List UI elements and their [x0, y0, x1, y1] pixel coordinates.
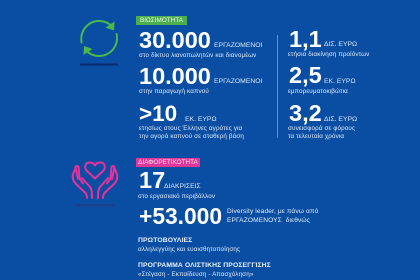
stat: 30.000 employees: ΕΡΓΑΖΟΜΕΝΟΙ — [214, 42, 262, 48]
text block: initiatives: ΠΡΩΤΟΒΟΥΛΙΕΣ — [138, 236, 192, 244]
stat: 1,1 billion euro — [288, 26, 370, 58]
divider — [277, 35, 278, 138]
stat: 10.000 employees: ΕΡΓΑΖΟΜΕΝΟΙ — [214, 78, 262, 84]
text block: holistic programme: ΠΡΟΓΡΑΜΜΑ ΟΛΙΣΤΙΚΗΣ ΠΡΟΣΕΓΓΙΣΗΣ — [138, 262, 271, 268]
stat: 3,2 billion euro: συνεισφορά σε φόρους — [288, 125, 355, 132]
stat: 1,1 billion euro: ΔΙΣ. ΕΥΡΩ — [324, 40, 357, 48]
stat: 17 awards — [138, 167, 215, 200]
stat: 3,2 billion euro: 3,2 — [289, 100, 322, 126]
stat: 2,5 million euro: 2,5 — [289, 62, 322, 88]
label: sustainability: ΒΙΩΣΙΜΟΤΗΤΑ — [140, 17, 183, 24]
stat: 2,5 million euro: εμπορευματοκιβώτια — [288, 88, 348, 95]
stat: 3,2 billion euro: ΔΙΣ. ΕΥΡΩ — [324, 116, 357, 122]
stat: 10.000 employees: στην παραγωγή καπνού — [139, 88, 209, 95]
stat: over 53.000 employees: ΕΡΓΑΖΟΜΕΝΟΥΣ διεθνώς — [227, 216, 310, 224]
stat: 10.000 employees — [139, 62, 262, 95]
stat: over 10 million euro: ετησίως στους Έλληνες αγρότες για — [139, 125, 242, 132]
text block: holistic programme: «Στέγαση - Εκπαίδευση - Απασχόληση» — [138, 270, 253, 278]
stat: 2,5 million euro — [288, 62, 356, 95]
label: diversity: ΔΙΑΦΟΡΕΤΙΚΟΤΗΤΑ — [138, 159, 198, 166]
stat: 17 awards: 17 — [139, 167, 165, 193]
stat: 10.000 employees: 10.000 — [139, 62, 211, 88]
stat: over 53.000 employees: Diversity leader, με πάνω από — [227, 208, 318, 215]
stat: 1,1 billion euro: 1,1 — [289, 26, 322, 52]
stat: over 10 million euro: >10 — [139, 100, 177, 126]
stat: over 10 million euro — [139, 100, 244, 140]
label: sustainability — [136, 16, 187, 25]
stat: 17 awards: ΔΙΑΚΡΙΣΕΙΣ — [164, 182, 201, 190]
stat: 3,2 billion euro — [288, 100, 357, 140]
stat: over 10 million euro: ΕΚ. ΕΥΡΩ — [185, 116, 217, 123]
stat: 30.000 employees — [139, 27, 262, 59]
stat: over 10 million euro: την αγορά καπνού σε σταθερή βάση — [139, 133, 244, 140]
text block: initiatives: αλληλεγγύης και ευαισθητοποίησης — [138, 246, 240, 252]
stat: 30.000 employees: στο δίκτυο λιανοπωλητών και διανομέων — [139, 52, 256, 59]
text block: holistic programme — [138, 262, 271, 278]
text block: initiatives — [138, 236, 240, 252]
stat: over 53.000 employees: +53.000 — [139, 203, 222, 229]
stat: 17 awards: στο εργασιακό περιβάλλον — [138, 193, 215, 200]
stat: 3,2 billion euro: τα τελευταία χρόνια — [288, 133, 344, 140]
stat: over 53.000 employees — [139, 203, 318, 229]
stat: 30.000 employees: 30.000 — [139, 27, 211, 53]
stat: 2,5 million euro: ΕΚ. ΕΥΡΩ — [324, 78, 356, 84]
stat: 1,1 billion euro: ετήσια διακίνηση προϊόντων — [288, 51, 369, 58]
